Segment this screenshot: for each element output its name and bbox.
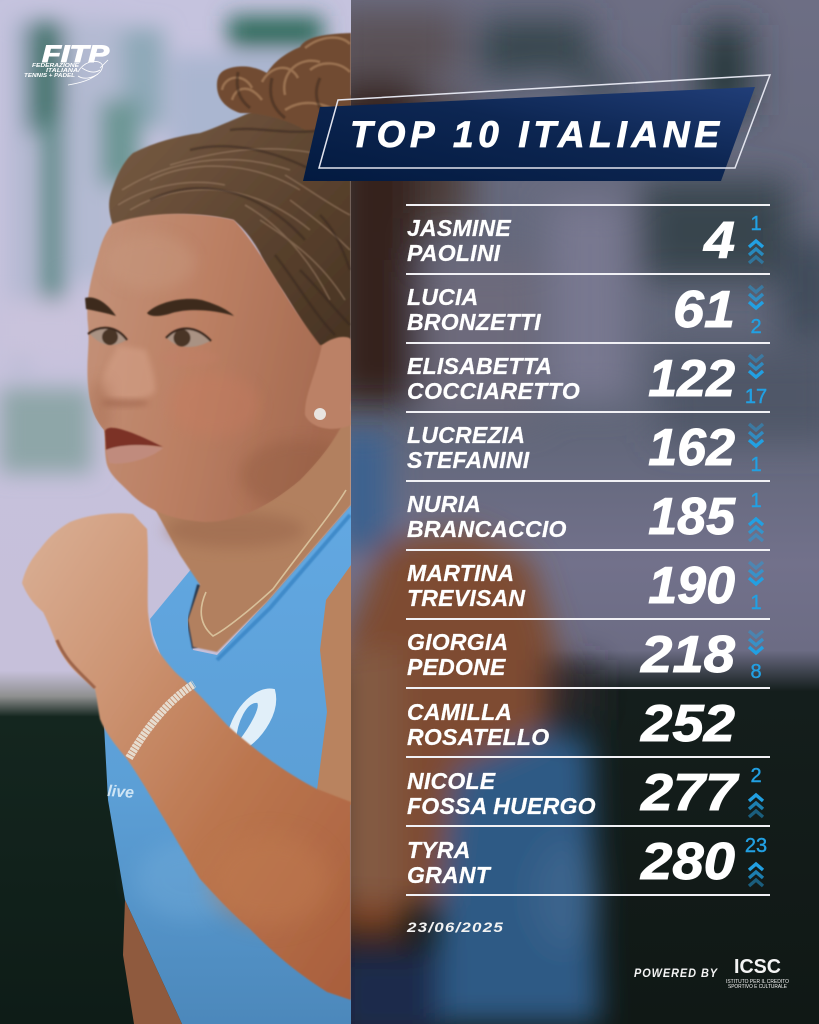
row: Martina Trevisan: TREVISAN: [407, 585, 525, 611]
row: Lucrezia Stefanini: STEFANINI: [407, 447, 530, 473]
row: Lucia Bronzetti: LUCIA: [407, 284, 479, 310]
row: Nicole Fossa Huergo: FOSSA HUERGO: [407, 793, 596, 819]
upper dark shapes: [330, 75, 420, 405]
eyebrows: [85, 297, 234, 316]
ranking table: [406, 205, 770, 895]
powered by ICSC: [634, 956, 789, 990]
logo: FITP: FITP: [42, 41, 110, 68]
row: Elisabetta Cocciaretto: ELISABETTA: [407, 353, 552, 379]
date: 23/06/2025: [406, 919, 504, 935]
arm and fist: [22, 513, 351, 1000]
row: Jasmine Paolini: JASMINE: [407, 215, 511, 241]
banner fill: [303, 87, 755, 181]
row: Martina Trevisan: MARTINA: [407, 560, 514, 586]
powered by ICSC: POWERED BY: [634, 968, 718, 980]
powered by ICSC: ISTITUTO PER IL CREDITO: [726, 979, 789, 985]
row: Nuria Brancaccio: 185: [648, 488, 736, 546]
row: Giorgia Pedone: GIORGIA: [407, 629, 508, 655]
row: Camilla Rosatello: [407, 695, 735, 753]
powered by ICSC: ICSC: [734, 956, 781, 978]
row: Nicole Fossa Huergo: 277: [640, 764, 739, 822]
row: Jasmine Paolini: [407, 212, 763, 270]
blurred right panel background: [330, 0, 819, 1024]
row: Giorgia Pedone: 8: [750, 661, 762, 683]
row: Tyra Grant: 280: [640, 833, 735, 891]
row: Lucia Bronzetti: [407, 281, 763, 339]
row: Nicole Fossa Huergo: [407, 764, 763, 822]
row: Nicole Fossa Huergo: 2: [750, 765, 762, 787]
row: Lucrezia Stefanini: LUCREZIA: [407, 422, 525, 448]
bracelet: [129, 684, 194, 758]
earring: [314, 408, 326, 420]
row: Martina Trevisan: 190: [648, 557, 735, 615]
row: Lucrezia Stefanini: 162: [648, 419, 735, 477]
eyes: [88, 328, 211, 347]
row: Tyra Grant: GRANT: [407, 862, 492, 888]
skin shading: [88, 246, 326, 502]
row: Camilla Rosatello: 252: [640, 695, 735, 753]
row: Nuria Brancaccio: BRANCACCIO: [407, 516, 567, 542]
row: Lucia Bronzetti: 2: [750, 316, 762, 338]
banner outline: [319, 75, 770, 168]
row: Elisabetta Cocciaretto: COCCIARETTO: [407, 378, 580, 404]
neck: [150, 410, 351, 652]
logo: FITP: FEDERAZIONE: [32, 63, 80, 69]
logo: FITP: ITALIANA: [46, 68, 79, 74]
row: Lucia Bronzetti: BRONZETTI: [407, 309, 541, 335]
row: Tyra Grant: TYRA: [407, 837, 471, 863]
row: Nuria Brancaccio: [407, 488, 763, 546]
shirt: [104, 505, 351, 1024]
shoulder: [317, 565, 351, 805]
row: Tyra Grant: [407, 833, 767, 891]
row: Nuria Brancaccio: NURIA: [407, 491, 481, 517]
icon: asics logo: [228, 689, 275, 746]
row: Elisabetta Cocciaretto: [407, 350, 767, 408]
shirt lettering: live: [107, 783, 135, 802]
row: Giorgia Pedone: PEDONE: [407, 654, 506, 680]
row: Martina Trevisan: [407, 557, 763, 615]
powered by ICSC: SPORTIVO E CULTURALE: [728, 984, 787, 990]
row: Jasmine Paolini: 4: [703, 212, 735, 270]
row: Tyra Grant: 23: [745, 835, 767, 857]
mouth: [105, 428, 163, 464]
logo: FITP: [24, 41, 110, 85]
row: Nuria Brancaccio: 1: [750, 490, 762, 512]
face: [85, 214, 360, 522]
row: Jasmine Paolini: PAOLINI: [407, 240, 501, 266]
back arm: [123, 900, 182, 1024]
photo panel: Jasmine Paolini: [0, 0, 360, 1024]
logo: FITP: TENNIS + PADEL: [24, 73, 75, 79]
skin and shirt shapes: [335, 430, 390, 550]
row: Giorgia Pedone: [407, 626, 763, 684]
row: Camilla Rosatello: CAMILLA: [407, 699, 512, 725]
ear: [305, 337, 351, 429]
row: Giorgia Pedone: 218: [640, 626, 735, 684]
title banner: [303, 75, 770, 181]
row: Lucia Bronzetti: 61: [673, 281, 735, 339]
row: Nicole Fossa Huergo: NICOLE: [407, 768, 496, 794]
row: Jasmine Paolini: 1: [750, 213, 762, 235]
necklace: [201, 490, 346, 636]
row: Elisabetta Cocciaretto: 122: [648, 350, 735, 408]
row: Lucrezia Stefanini: [407, 419, 763, 477]
row: Camilla Rosatello: ROSATELLO: [407, 724, 549, 750]
row: Elisabetta Cocciaretto: 17: [745, 386, 767, 408]
blurred stadium background: [0, 0, 351, 900]
row: Lucrezia Stefanini: 1: [750, 454, 762, 476]
title: TOP 10 ITALIANE: [350, 114, 720, 155]
hair: [109, 33, 351, 350]
row: Martina Trevisan: 1: [750, 592, 762, 614]
